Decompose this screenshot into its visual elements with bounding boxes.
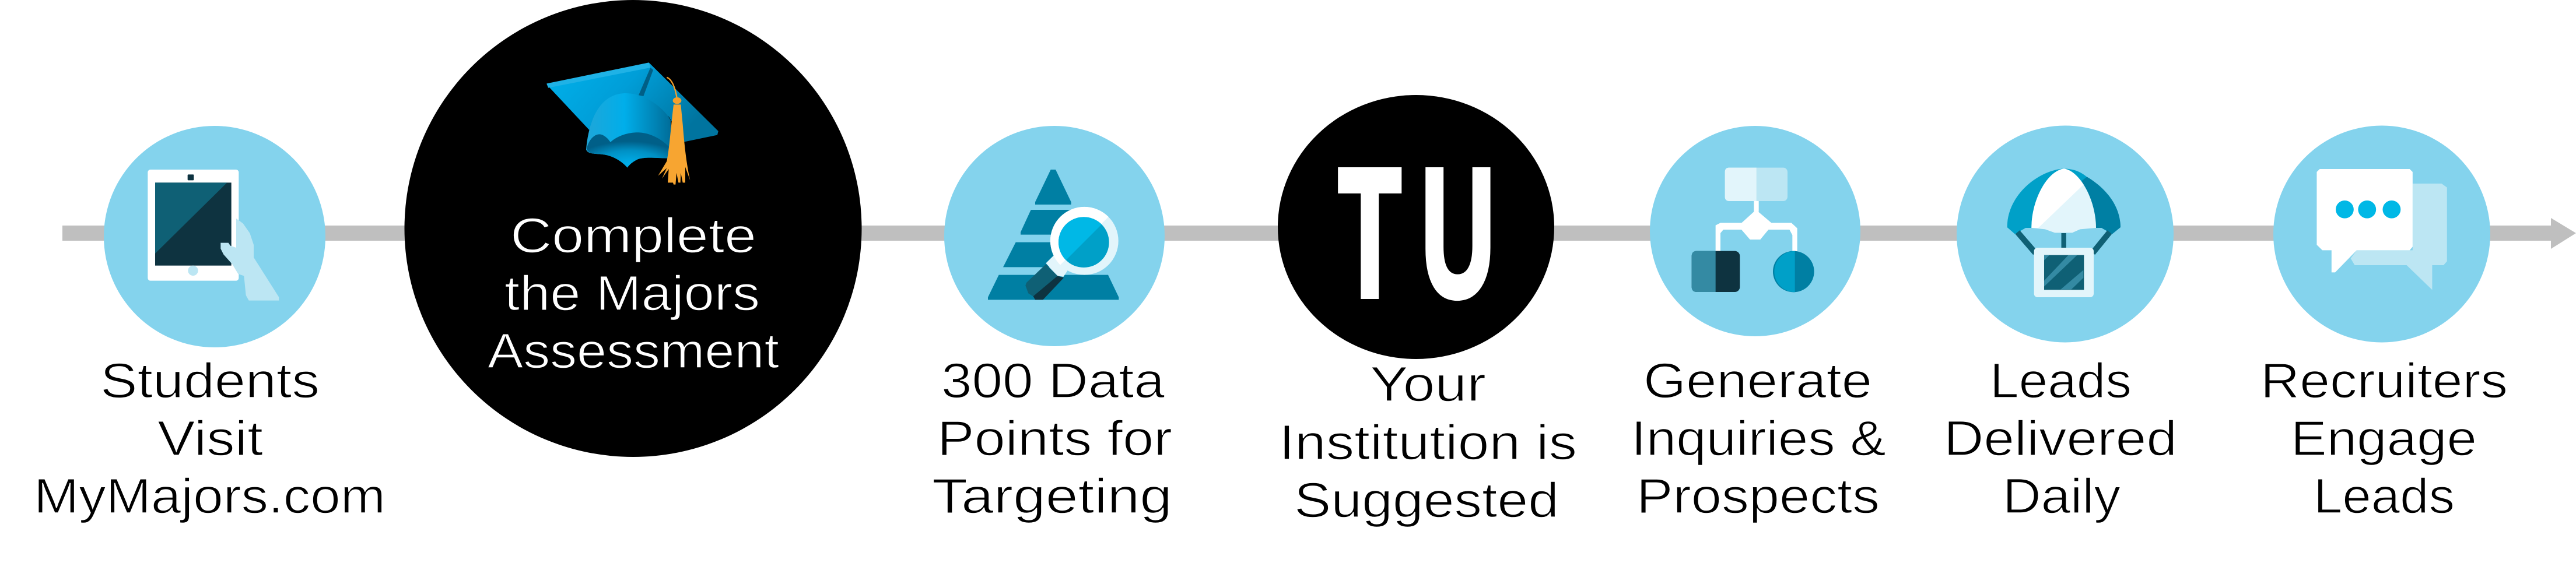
icon: pyramid and magnifier (944, 126, 1165, 346)
label: Complete the Majors Assessment: the Majors (504, 266, 760, 321)
logo: TU: U (1421, 131, 1495, 335)
label: Your Institution is Suggested: Institution is (1279, 415, 1577, 470)
label: Your Institution is Suggested: Suggested (1294, 473, 1559, 527)
label: Generate Inquiries & Prospects: Generate (1643, 353, 1872, 408)
label: Generate Inquiries & Prospects: Inquiries & (1631, 411, 1886, 466)
label: Complete the Majors Assessment: Assessment (488, 323, 779, 378)
step 3: data points (932, 126, 1172, 523)
step 5: generate inquiries (1631, 126, 1886, 523)
label: Leads Delivered Daily (1944, 353, 2177, 523)
label: Leads Delivered Daily: Daily (2003, 469, 2121, 523)
label: Complete the Majors Assessment (488, 208, 779, 378)
icon: tablet and hand (104, 126, 325, 347)
icon: flowchart (1650, 126, 1860, 336)
step 7: recruiters engage (2260, 126, 2508, 523)
label: 300 Data Points for Targeting: 300 Data (941, 353, 1165, 408)
step 2: complete the assessment (405, 0, 862, 457)
icon: chat bubbles (2273, 126, 2490, 343)
icon: graduation cap (546, 62, 719, 185)
label: Students Visit MyMajors.com: Students (100, 353, 320, 408)
step 4: institution suggested (1278, 95, 1577, 527)
label: Students Visit MyMajors.com (34, 353, 385, 523)
label: Leads Delivered Daily: Leads (1990, 353, 2132, 408)
label: Your Institution is Suggested: Your (1370, 357, 1486, 411)
label: Recruiters Engage Leads: Engage (2291, 411, 2477, 466)
label: Recruiters Engage Leads: Recruiters (2260, 353, 2508, 408)
step 6: leads delivered (1944, 126, 2177, 523)
label: Recruiters Engage Leads: Leads (2314, 469, 2455, 523)
label: Generate Inquiries & Prospects (1631, 353, 1886, 523)
label: Recruiters Engage Leads (2260, 353, 2508, 523)
label: Generate Inquiries & Prospects: Prospects (1636, 469, 1880, 523)
label: 300 Data Points for Targeting: Points for (937, 411, 1172, 466)
timeline arrow (62, 218, 2576, 249)
logo: TU: T (1338, 131, 1401, 335)
step 1: students visit (34, 126, 385, 523)
label: Students Visit MyMajors.com: MyMajors.com (34, 469, 385, 523)
label: Your Institution is Suggested (1279, 357, 1577, 527)
label: Students Visit MyMajors.com: Visit (157, 411, 263, 466)
logo: TU (1338, 131, 1495, 335)
label: 300 Data Points for Targeting: Targeting (932, 469, 1172, 523)
label: 300 Data Points for Targeting (932, 353, 1172, 523)
label: Leads Delivered Daily: Delivered (1944, 411, 2177, 466)
icon: parachute (1957, 126, 2174, 343)
label: Complete the Majors Assessment: Complete (510, 208, 756, 263)
